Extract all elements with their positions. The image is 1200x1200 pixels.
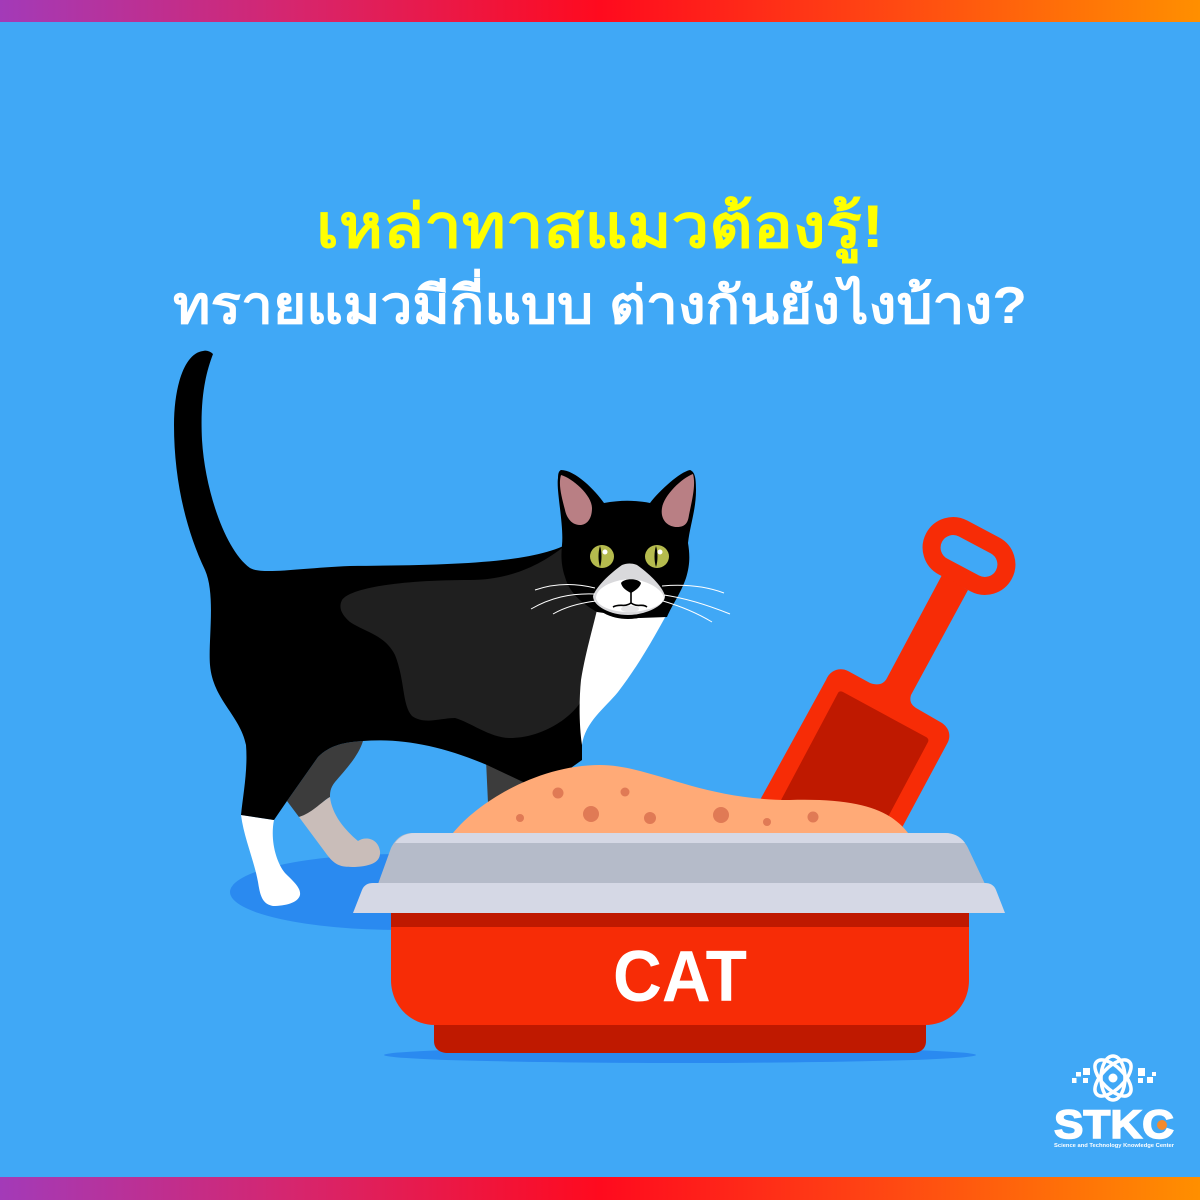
logo tagline: Science and Technology Knowledge Center [1054, 1143, 1175, 1149]
dark coat patch [340, 548, 600, 738]
box rim shade [391, 913, 969, 927]
STKC logo [1054, 1054, 1175, 1149]
sand specks [516, 788, 818, 826]
cat shadow [230, 854, 570, 930]
sand [453, 765, 908, 833]
right eye [645, 545, 669, 568]
CAT label: CAT [613, 937, 747, 1017]
right ear inner [662, 474, 694, 527]
logo atom icon [1089, 1054, 1137, 1102]
lid highlight [395, 833, 965, 843]
near hind leg upper [287, 741, 363, 817]
lid top [378, 833, 985, 884]
cat [174, 351, 730, 906]
shovel [760, 518, 1014, 850]
title [173, 193, 1027, 335]
shovel blade inner [780, 691, 928, 832]
whiskers [531, 584, 730, 622]
head [558, 470, 696, 618]
front white paw [241, 815, 300, 906]
litter box [353, 833, 1005, 1053]
box base [434, 1020, 926, 1053]
shovel handle loop [924, 518, 1014, 594]
lid lip [353, 883, 1005, 913]
title line 1: เหล่าทาสแมวต้องรู้! [316, 193, 884, 264]
logo pixel squares [1072, 1068, 1156, 1083]
shovel blade and shaft [760, 575, 968, 850]
logo orange dot [1157, 1120, 1167, 1130]
body and tail [174, 351, 600, 820]
white chest [580, 606, 668, 745]
hind paw [299, 797, 380, 867]
left ear inner [560, 475, 592, 525]
top gradient bar [0, 0, 1200, 22]
litter box shadow [384, 1047, 976, 1063]
left eye [590, 545, 614, 568]
title line 2: ทรายแมวมีกี่แบบ ต่างกันยังไงบ้าง? [173, 269, 1027, 335]
bottom gradient bar [0, 1177, 1200, 1200]
muzzle [593, 563, 665, 619]
logo wordmark: STKC [1054, 1103, 1174, 1147]
far hind leg [486, 760, 540, 803]
box body [391, 913, 969, 1025]
